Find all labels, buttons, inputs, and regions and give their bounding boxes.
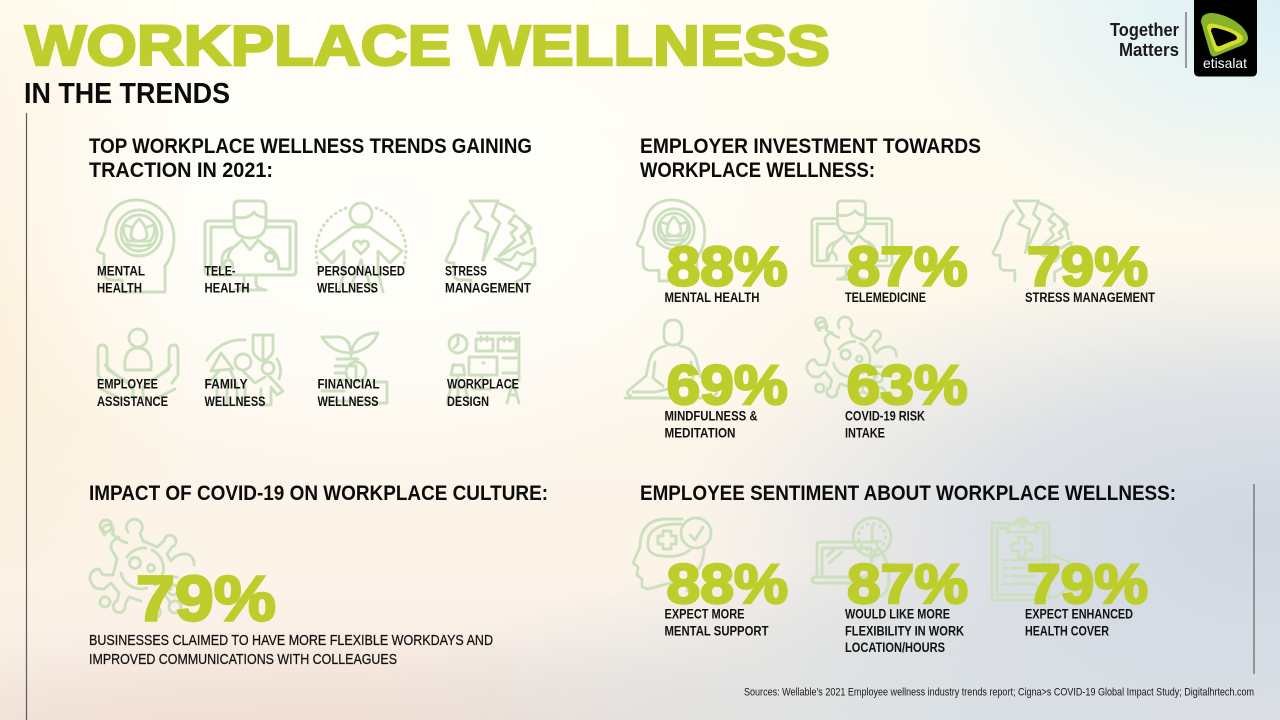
label: telehealth: [204, 263, 250, 296]
stat: 79%: 79%: [136, 563, 276, 635]
stat: 63% covid risk: [845, 353, 968, 440]
stat: 79% stress management: 79%: [1027, 235, 1148, 298]
icon: clipboard and shield: [992, 518, 1072, 600]
label: financial wellness: WELLNESS: [318, 394, 378, 409]
stat: 87% flexibility: WOULD LIKE MORE: [845, 606, 950, 621]
stat: 87% telemedicine: TELEMEDICINE: [845, 290, 926, 305]
heading: top trends: [89, 135, 532, 182]
stat: 88% mental support: 88%: [666, 552, 788, 615]
stat: 88% mental support: MENTAL SUPPORT: [664, 624, 769, 639]
stat: 63% covid risk: INTAKE: [845, 425, 885, 440]
label: family wellness: [204, 377, 266, 409]
icon: laptop and clock: [812, 518, 891, 597]
stat: 69% mindfulness: MINDFULNESS &: [664, 409, 758, 424]
label: employee assistance: EMPLOYEE: [97, 377, 158, 392]
icon: workplace design: [447, 333, 519, 403]
heading: employer investment: WORKPLACE WELLNESS:: [640, 159, 875, 182]
stat: 87% flexibility: 87%: [847, 552, 968, 615]
label: stress management: [445, 263, 532, 296]
heading: employer investment: [640, 135, 981, 182]
label: employee assistance: [97, 377, 168, 409]
label: mental health: [97, 263, 145, 296]
stat: 87% flexibility: FLEXIBILITY IN WORK: [845, 624, 964, 639]
icon: financial: [322, 333, 387, 403]
icon: stress head: [446, 201, 535, 292]
stat: 69% mindfulness: 69%: [667, 353, 788, 416]
icon: virus: [807, 317, 896, 401]
heading: employee sentiment: EMPLOYEE SENTIMENT ABOUT WORKPLACE WELLNESS:: [640, 482, 1176, 505]
text: businesses claim: BUSINESSES CLAIMED TO HAVE MORE FLEXIBLE WORKDAYS AND: [89, 632, 493, 649]
icon: meditation: [625, 320, 717, 398]
stat: 79% health cover: HEALTH COVER: [1025, 624, 1109, 639]
heading: employer investment: EMPLOYER INVESTMENT TOWARDS: [640, 135, 981, 158]
text: businesses claim: [89, 632, 493, 668]
title: WORKPLACE WELLNESS: [25, 14, 830, 78]
label: telehealth: HEALTH: [204, 281, 250, 296]
icon: family: [207, 335, 283, 405]
stat: 87% telemedicine: 87%: [847, 235, 968, 298]
stat: 88% mental health: 88%: [667, 235, 788, 298]
stat: 87% flexibility: LOCATION/HOURS: [845, 640, 945, 655]
panel: top wellness trends: [89, 135, 535, 409]
heading: impact of covid: IMPACT OF COVID-19 ON WORKPLACE CULTURE:: [89, 482, 548, 505]
subtitle: IN THE TRENDS: [24, 78, 230, 110]
label: workplace design: [447, 377, 519, 409]
stat: 79% health cover: EXPECT ENHANCED: [1025, 606, 1133, 621]
label: personalised wellness: WELLNESS: [317, 281, 378, 296]
right vertical rule: [1253, 484, 1255, 674]
icon: virus: [90, 519, 194, 618]
label: family wellness: WELLNESS: [204, 394, 266, 409]
panel: employer investment: [625, 135, 1156, 440]
icon: stress head: [993, 201, 1071, 281]
stat: 79% health cover: 79%: [1027, 552, 1148, 615]
text: businesses claim: IMPROVED COMMUNICATIONS WITH COLLEAGUES: [89, 651, 397, 668]
icon: mental health head: [97, 200, 174, 292]
stat: 88% mental support: EXPECT MORE: [664, 606, 744, 621]
label: workplace design: WORKPLACE: [447, 377, 519, 392]
stat: 69% mindfulness: [664, 353, 788, 440]
icon: personalised body: [316, 203, 406, 292]
stat: 63% covid risk: COVID-19 RISK: [845, 409, 925, 424]
logo: Together Matters etisalat: Together: [1110, 20, 1179, 40]
stat: 79% health cover: [1025, 552, 1148, 639]
label: mental health: HEALTH: [97, 281, 142, 296]
icon: doctor on screen: [205, 201, 296, 290]
label: workplace design: DESIGN: [447, 394, 489, 409]
panel: employee sentiment: [633, 482, 1176, 655]
label: personalised wellness: PERSONALISED: [317, 263, 405, 278]
logo: Together Matters etisalat: etisalat: [1203, 55, 1247, 71]
icon: doctor on screen: [812, 201, 892, 279]
icon: mental health head: [637, 200, 705, 281]
label: family wellness: FAMILY: [204, 377, 248, 392]
stat: 88% mental support: [664, 552, 788, 639]
label: financial wellness: FINANCIAL: [318, 377, 380, 392]
icon: head with cross and check: [633, 518, 711, 597]
panel: impact of covid: [89, 482, 548, 668]
heading: top trends: TOP WORKPLACE WELLNESS TRENDS GAINING: [89, 135, 532, 158]
label: financial wellness: [318, 377, 380, 409]
heading: top trends: TRACTION IN 2021:: [89, 159, 273, 182]
label: stress management: STRESS: [445, 263, 487, 278]
label: personalised wellness: [317, 263, 405, 296]
logo: Together Matters etisalat: Matters: [1119, 40, 1179, 60]
stat: 63% covid risk: 63%: [847, 353, 968, 416]
label: mental health: MENTAL: [97, 263, 145, 278]
left vertical rule: [26, 113, 28, 720]
logo: Together Matters etisalat: [1110, 0, 1257, 76]
stat: 79% stress management: STRESS MANAGEMENT: [1025, 290, 1156, 305]
stat: 88% mental health: MENTAL HEALTH: [664, 290, 760, 305]
label: telehealth: TELE-: [204, 263, 236, 278]
stat: 69% mindfulness: MEDITATION: [664, 425, 736, 440]
icon: employee assistance: [98, 329, 178, 399]
label: stress management: MANAGEMENT: [445, 281, 532, 296]
label: employee assistance: ASSISTANCE: [97, 394, 168, 409]
stat: 87% flexibility: [845, 552, 968, 655]
